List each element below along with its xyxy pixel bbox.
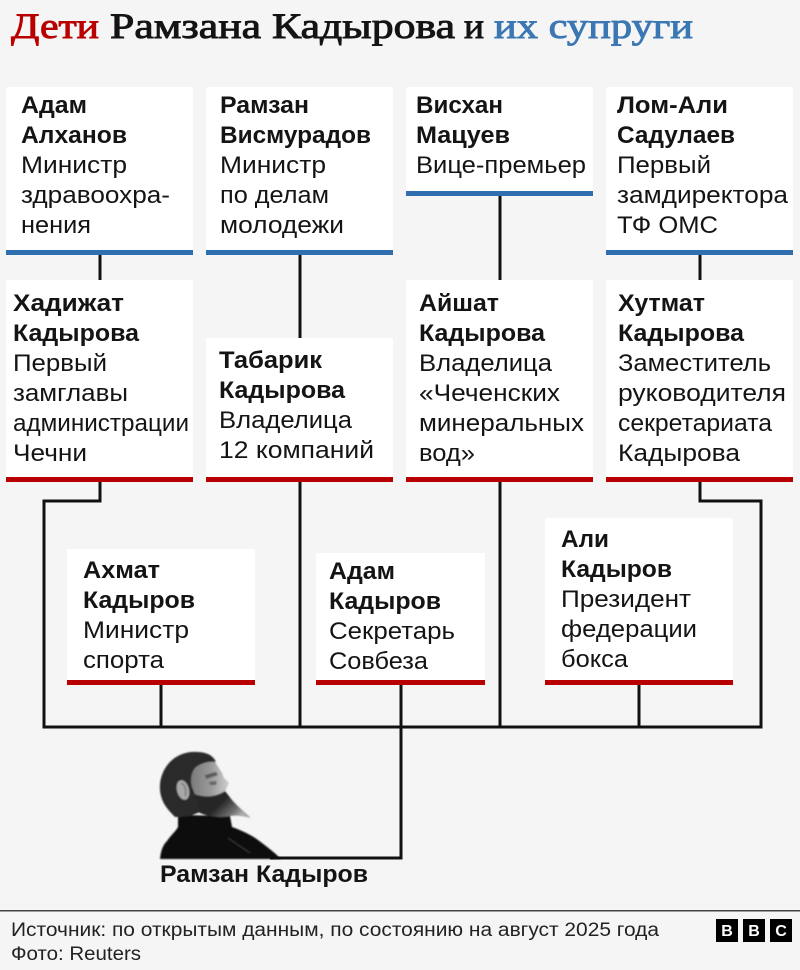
panel: Лом-Али Садулаев: Садулаев [617, 122, 735, 149]
panel: Хадижат Кадырова [6, 280, 193, 482]
panel: Ахмат Кадыров: Министр [83, 617, 189, 644]
icon: BBC logo: B [748, 923, 760, 940]
panel: Адам Алханов: нения [21, 212, 91, 239]
panel: Али Кадыров [545, 518, 733, 685]
panel: Адам Алханов: Министр [21, 152, 127, 179]
panel: Табарик Кадырова: Кадырова [219, 377, 346, 404]
panel: Рамзан Висмурадов [206, 87, 393, 255]
panel: Адам Кадыров: Кадыров [329, 588, 441, 615]
panel: Адам Алханов: Адам [21, 92, 87, 119]
panel: Рамзан Висмурадов: Рамзан [220, 92, 309, 119]
panel: Хутмат Кадырова: Кадырова [618, 440, 741, 467]
panel: Али Кадыров: Али [561, 526, 609, 553]
icon: BBC logo: C [775, 923, 787, 940]
panel: Табарик Кадырова: Владелица [219, 407, 353, 434]
panel: Хадижат Кадырова: Кадырова [13, 320, 140, 347]
panel: Адам Кадыров: Совбеза [329, 648, 429, 675]
panel: Лом-Али Садулаев: замдиректора [617, 182, 789, 209]
panel: Ахмат Кадыров [67, 549, 255, 685]
title: и [464, 6, 484, 46]
panel: Рамзан Висмурадов: Висмурадов [220, 122, 371, 149]
panel: Али Кадыров: Президент [561, 586, 691, 613]
title [11, 6, 693, 46]
panel: Рамзан Висмурадов: Министр [220, 152, 326, 179]
panel: Висхан Мацуев: Вице-премьер [416, 152, 586, 179]
panel: Айшат Кадырова: «Чеченских [419, 380, 560, 407]
connector lines [44, 196, 761, 858]
panel: Айшат Кадырова: вод» [419, 440, 475, 467]
title: Рамзана Кадырова [110, 6, 455, 46]
panel: Айшат Кадырова: Кадырова [419, 320, 546, 347]
icon: BBC logo: B [721, 923, 733, 940]
panel: Ахмат Кадыров: Кадыров [83, 587, 195, 614]
panel: Лом-Али Садулаев: Первый [617, 152, 711, 179]
panel: Адам Кадыров: Секретарь [329, 618, 455, 645]
panel: Хадижат Кадырова: Первый [13, 350, 107, 377]
panel: Айшат Кадырова: Айшат [419, 290, 499, 317]
panel: Айшат Кадырова: Владелица [419, 350, 553, 377]
panel: Лом-Али Садулаев: ТФ ОМС [617, 212, 718, 239]
panel: Адам Алханов: здравоохра- [21, 182, 170, 209]
panel: Рамзан Висмурадов: молодежи [220, 212, 344, 239]
panel: Айшат Кадырова: минеральных [419, 410, 584, 437]
panel: Ахмат Кадыров: Ахмат [83, 557, 160, 584]
panel: Айшат Кадырова [406, 280, 593, 482]
panel: Хадижат Кадырова: Чечни [13, 440, 87, 467]
panel: Хутмат Кадырова: Хутмат [618, 290, 705, 317]
panel: Хадижат Кадырова: замглавы [13, 380, 128, 407]
panel: Адам Кадыров: Адам [329, 558, 395, 585]
panel: Хутмат Кадырова: секретариата [618, 410, 773, 437]
panel: Хадижат Кадырова: администрации [13, 410, 189, 437]
panel: Али Кадыров: бокса [561, 646, 629, 673]
panel: Висхан Мацуев: Мацуев [416, 122, 510, 149]
panel: Висхан Мацуев: Висхан [416, 92, 503, 119]
panel: Хадижат Кадырова: Хадижат [13, 290, 124, 317]
panel: Хутмат Кадырова [606, 280, 793, 482]
panel: Табарик Кадырова: Табарик [219, 347, 323, 374]
panel: Ахмат Кадыров: спорта [83, 647, 165, 674]
footer rule and source [0, 910, 800, 965]
footer rule and source: Источник: по открытым данным, по состоянию на август 2025 года [11, 920, 659, 941]
panel: Али Кадыров: федерации [561, 616, 697, 643]
icon: BBC logo [716, 919, 792, 942]
panel: Табарик Кадырова: 12 компаний [219, 437, 374, 464]
panel: Хутмат Кадырова: Кадырова [618, 320, 745, 347]
icon: portrait of Ramzan Kadyrov [160, 752, 281, 859]
panel: Табарик Кадырова [206, 338, 393, 482]
panel: Али Кадыров: Кадыров [561, 556, 672, 583]
title: их супруги [494, 6, 693, 46]
title: Дети [11, 6, 99, 46]
panel: Лом-Али Садулаев [606, 87, 793, 255]
panel: Рамзан Висмурадов: по делам [220, 182, 329, 209]
panel: Адам Кадыров [316, 553, 485, 685]
label: Рамзан Кадыров: Рамзан Кадыров [160, 861, 368, 888]
panel: Висхан Мацуев [406, 87, 593, 196]
panel: Адам Алханов [6, 87, 193, 255]
panel: Лом-Али Садулаев: Лом-Али [617, 92, 728, 119]
footer rule and source: Фото: Reuters [11, 944, 141, 965]
panel: Адам Алханов: Алханов [21, 122, 127, 149]
panel: Хутмат Кадырова: руководителя [618, 380, 786, 407]
panel: Хутмат Кадырова: Заместитель [618, 350, 771, 377]
